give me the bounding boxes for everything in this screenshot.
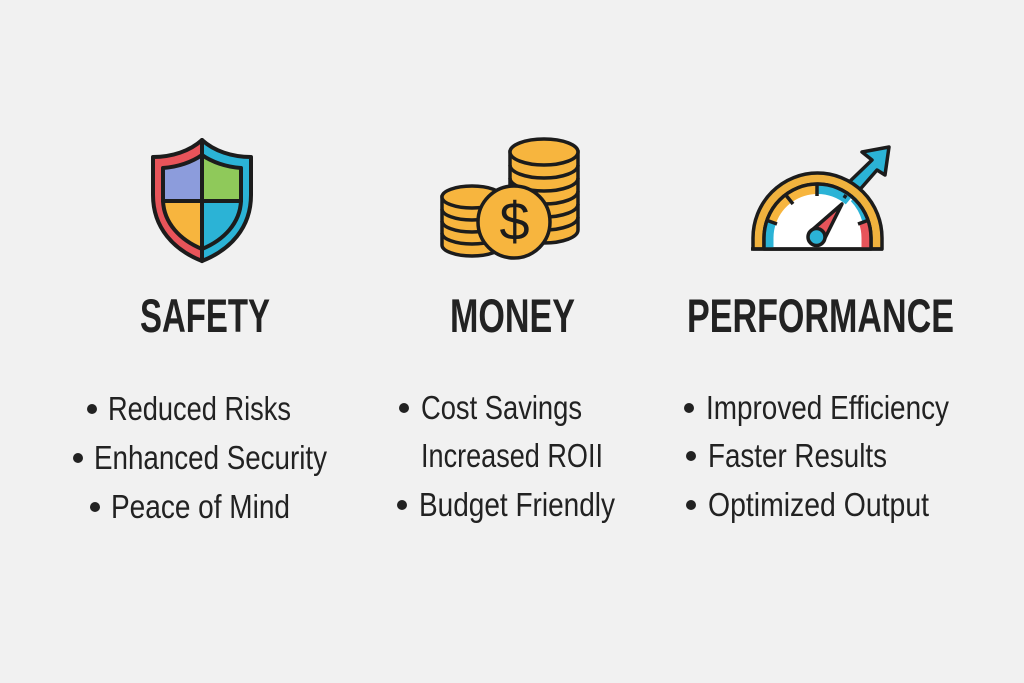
list: safety benefits [73, 390, 327, 525]
bullet: faster results: Faster Results [708, 437, 887, 474]
bullet: peace of mind: Peace of Mind [111, 488, 290, 525]
panel: performance [684, 147, 954, 523]
bullet: improved efficiency: Improved Efficiency [706, 389, 949, 426]
bullet: cost savings: Cost Savings [421, 389, 582, 426]
list: performance benefits [684, 389, 949, 523]
bullet: reduced risks: Reduced Risks [108, 390, 291, 427]
line: increased roi: Increased ROII [421, 437, 603, 474]
panel: safety [73, 140, 327, 525]
heading: money: MONEY [450, 289, 575, 342]
bullet: optimized output: Optimized Output [708, 486, 929, 523]
icon: coin stacks [442, 139, 578, 258]
bullet: budget friendly: Budget Friendly [419, 486, 615, 523]
icon: speedometer with arrow [751, 147, 889, 249]
list: money benefits [397, 389, 615, 523]
panel: money [397, 139, 615, 523]
heading: safety: SAFETY [140, 289, 270, 342]
icon: coin stacks: $ [499, 192, 530, 252]
arrow [845, 147, 889, 194]
bullet: enhanced security: Enhanced Security [94, 439, 327, 476]
icon: shield [153, 140, 251, 261]
